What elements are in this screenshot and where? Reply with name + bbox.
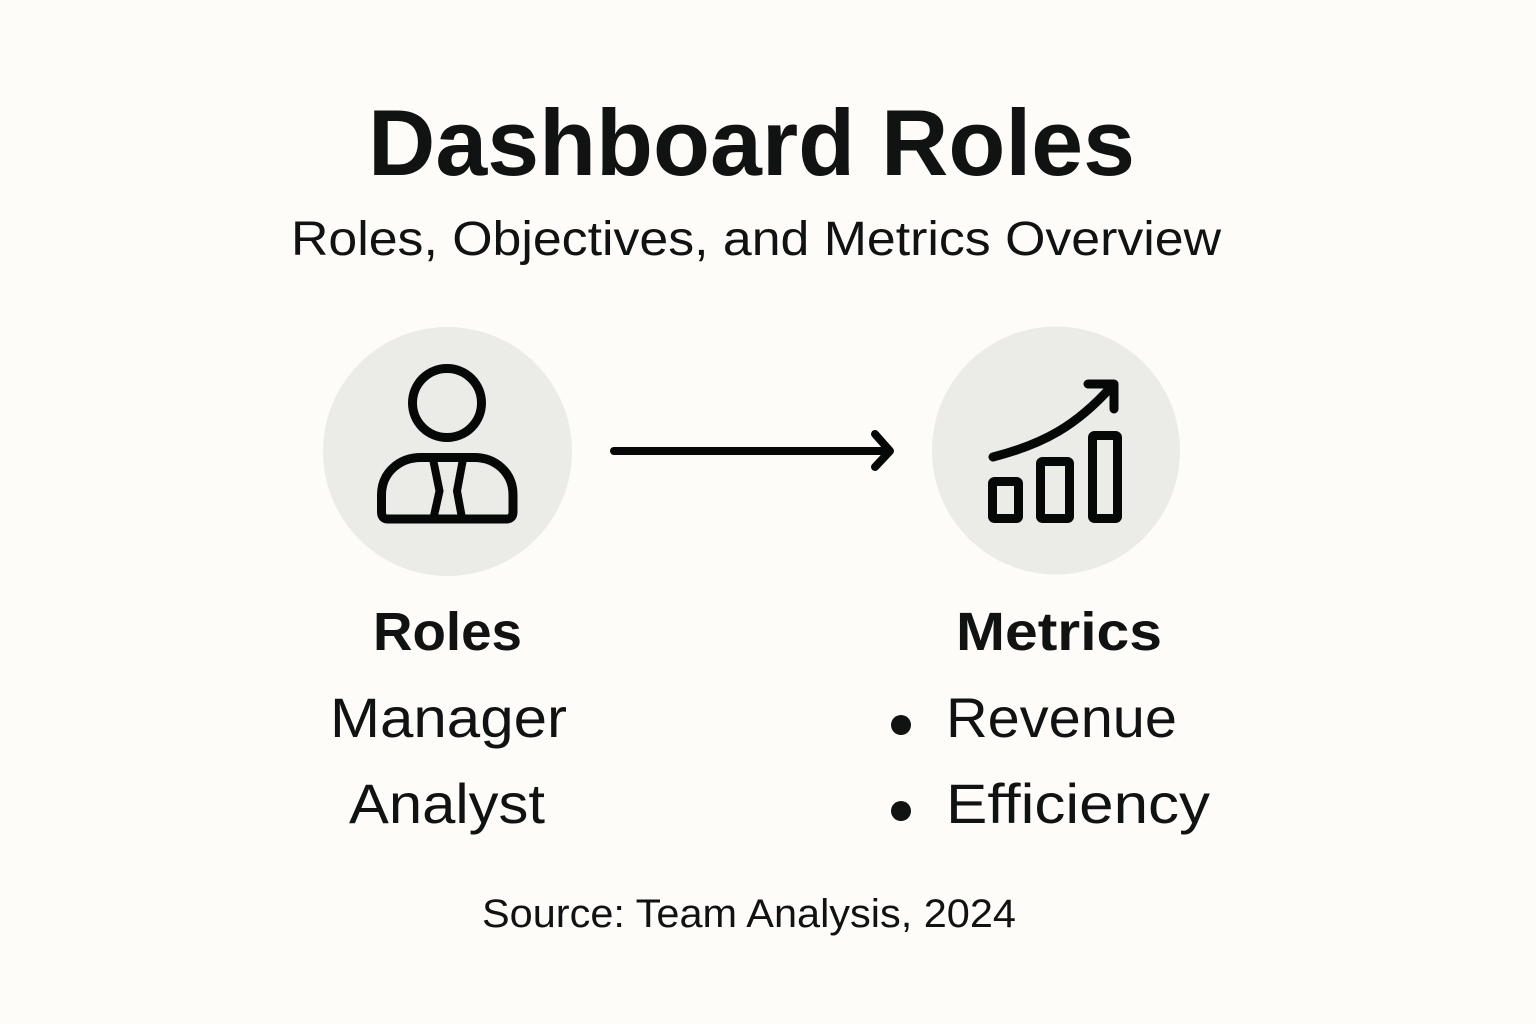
source note: Source: Team Analysis, 2024 [482, 892, 1016, 936]
heading: roles: Roles [373, 602, 522, 662]
role: analyst: Analyst [349, 772, 545, 835]
metric: efficiency: Efficiency [946, 772, 1210, 835]
icon: person in circle [323, 327, 572, 576]
metric: revenue: Revenue [946, 686, 1177, 749]
arrow: roles to metrics [614, 434, 890, 467]
heading: metrics: Metrics [956, 602, 1162, 662]
title: Dashboard Roles [368, 90, 1135, 195]
bullet: efficiency [891, 801, 911, 821]
icon: growth chart in circle [932, 326, 1180, 574]
subtitle: Roles, Objectives, and Metrics Overview [291, 213, 1221, 266]
bullet: revenue [891, 715, 911, 735]
role: manager: Manager [330, 686, 567, 749]
